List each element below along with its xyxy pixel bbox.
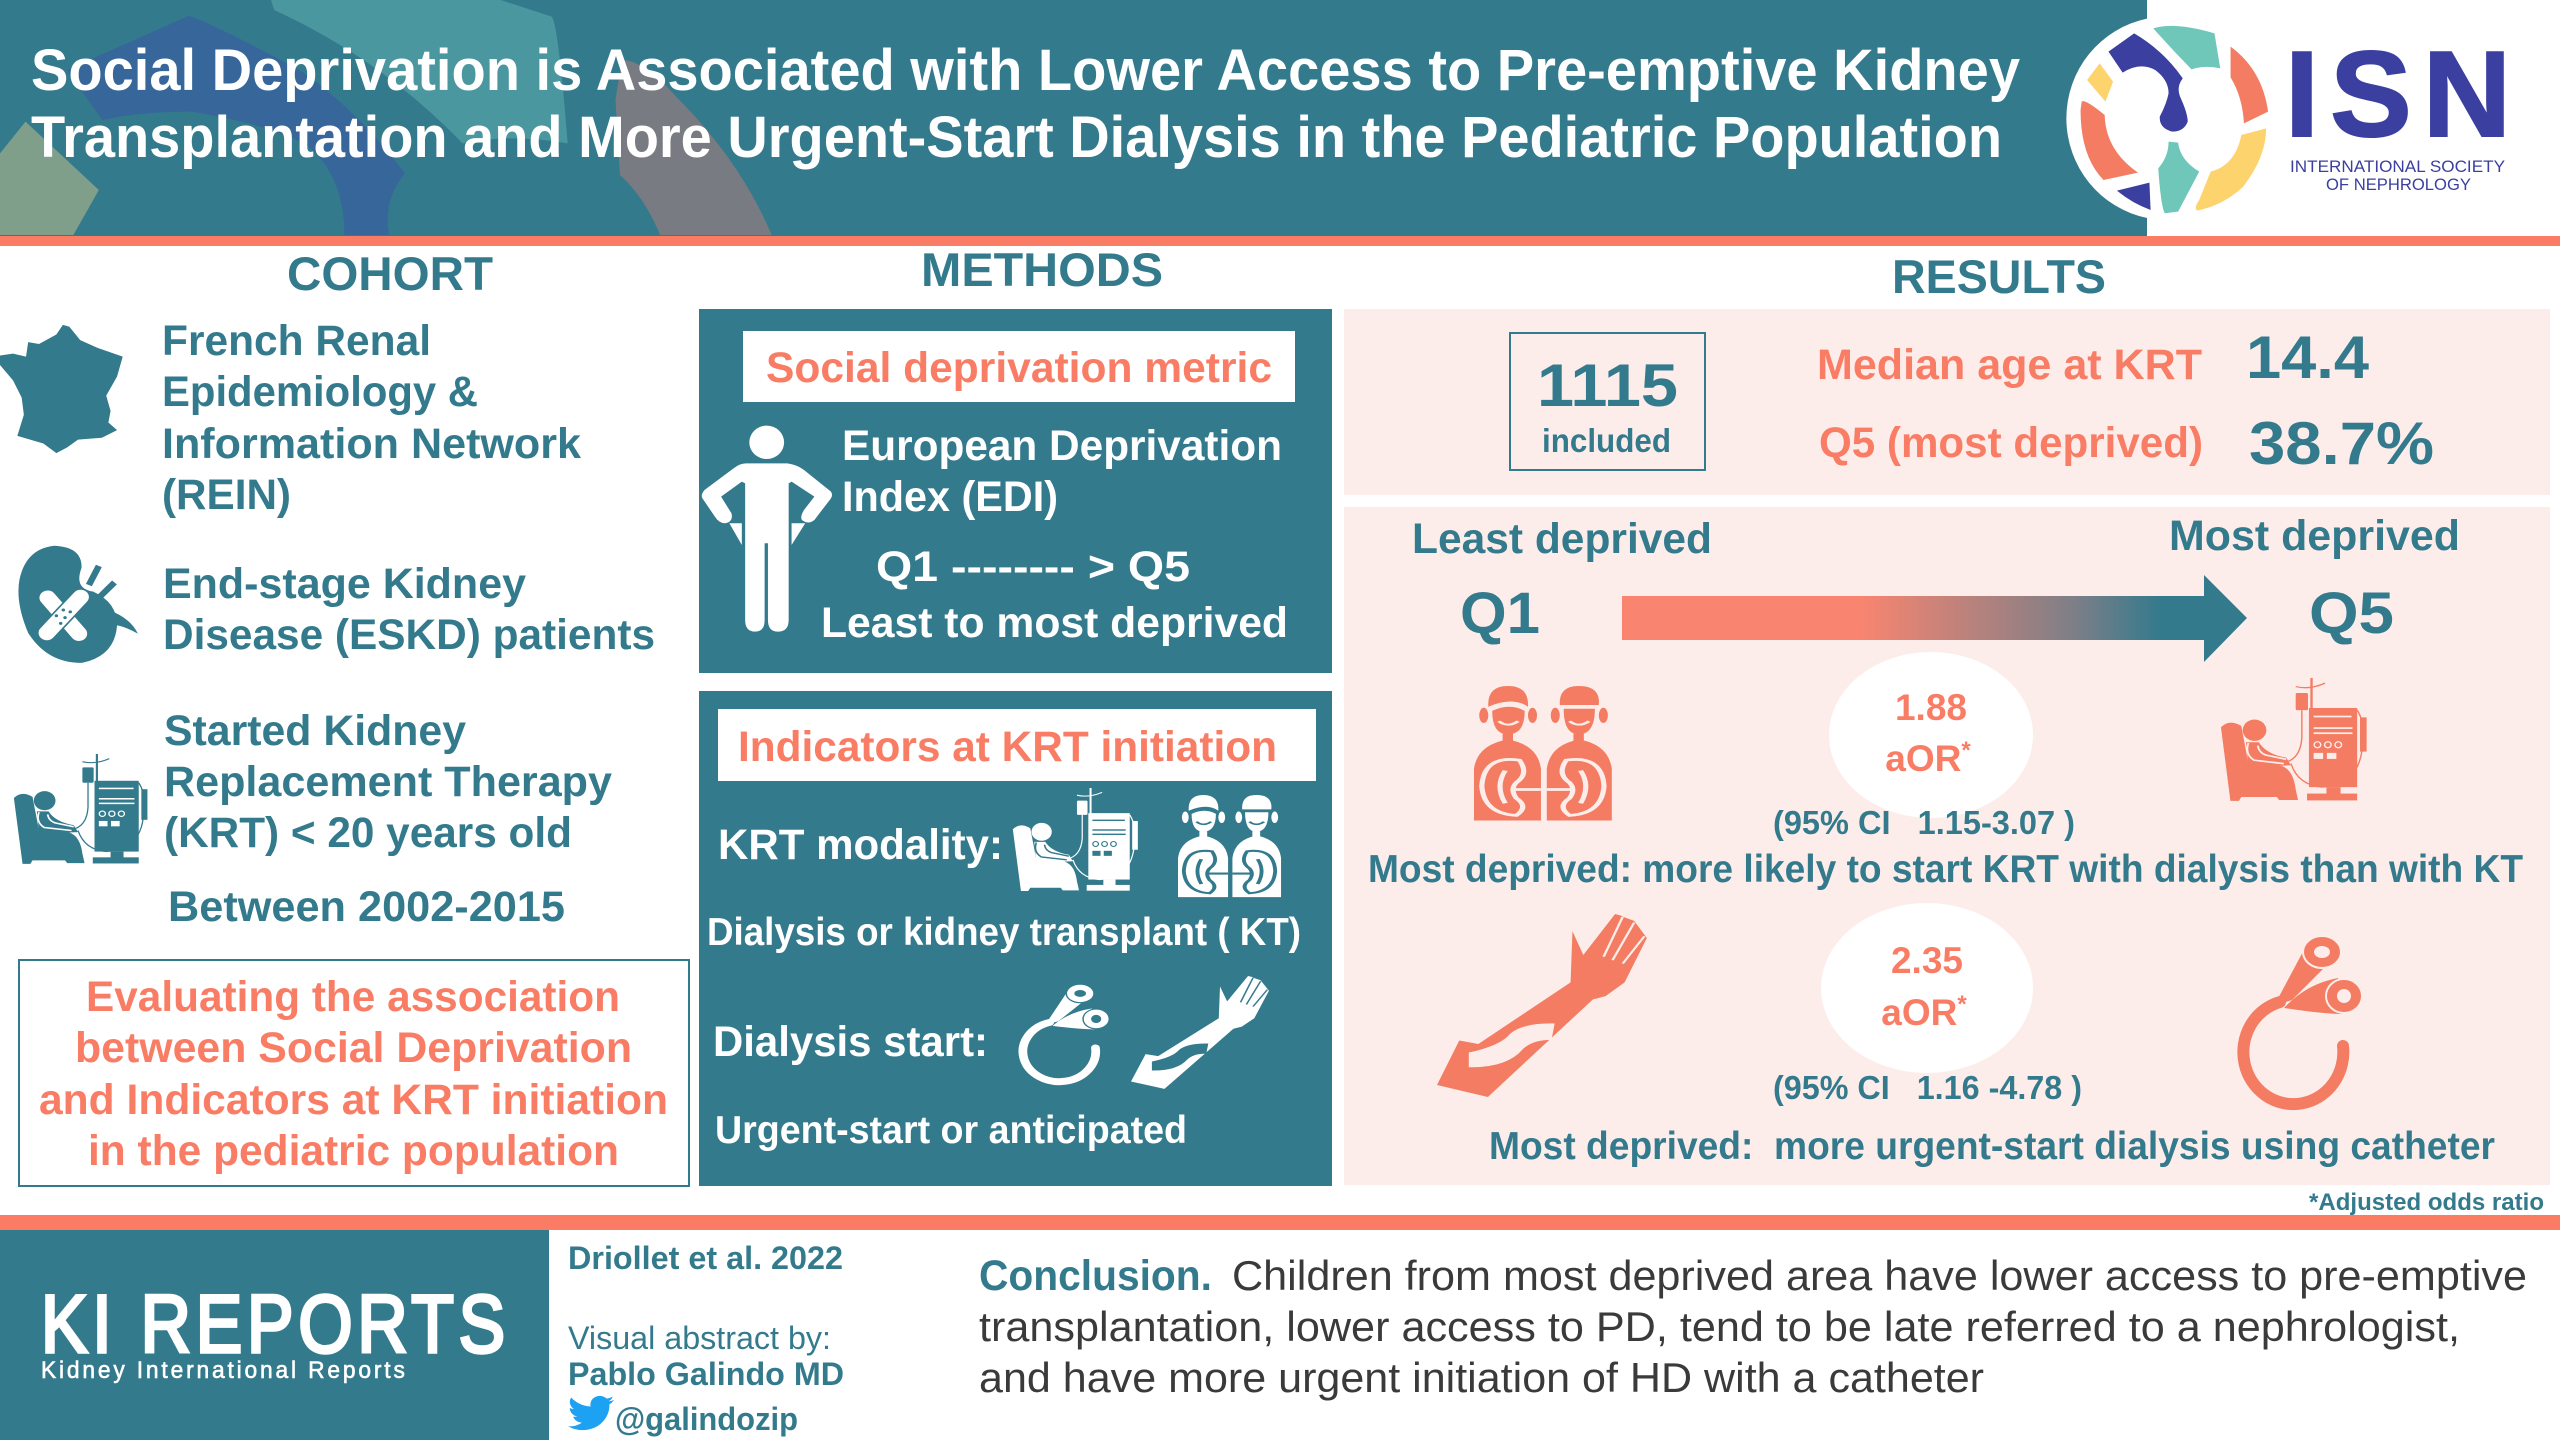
most deprived label: Q5 [2309,581,2394,646]
icon: catheter, white [1023,984,1109,1082]
cohort text: age and period: Started Kidney [164,707,466,755]
panel: cohort results [1344,309,2550,495]
panel: indicators at KRT initiation [699,691,1332,1186]
odds ratio bubble 1: 1.88 [1895,687,1967,728]
conclusion: Conclusion. [979,1252,1212,1300]
icon: fistula arm, white [1131,976,1269,1089]
cohort text: patients: End-stage Kidney [163,560,526,608]
cohort text: age and period: Between 2002-2015 [168,883,565,931]
citation and credits: @galindozip [615,1401,798,1437]
KI Reports journal logo: Kidney International Reports [41,1356,405,1383]
median age [1817,324,2370,391]
citation and credits: Pablo Galindo MD [568,1356,844,1392]
KRT modality label: KRT modality: [718,821,1003,869]
included count box: 1115 [1537,352,1678,419]
top salmon divider [0,236,2560,246]
most deprived share [1819,410,2434,477]
icon: dialysis, white [1013,788,1138,891]
panel: social deprivation metric [699,309,1332,673]
most deprived label: Most deprived [2169,512,2460,560]
icon: twitter bird [568,1396,614,1430]
aim callout: in the pediatric population [88,1127,619,1175]
footnote: *Adjusted odds ratio [2309,1189,2544,1216]
heading: results: RESULTS [1892,250,2106,303]
icon: fistula arm, salmon [1437,914,1647,1097]
finding 2: Most deprived: more urgent-start dialysis using catheter [1489,1125,2495,1168]
metric text [821,422,1288,647]
ISN logo [2066,19,2511,218]
odds ratio bubble 2 [1821,903,2033,1073]
metric text: Q1 -------- > Q5 [876,543,1190,591]
odds ratio bubble 1: * [1961,737,1971,764]
included count box: included [1542,422,1671,459]
KI Reports journal logo [0,1230,549,1440]
aim callout [19,960,689,1186]
citation and credits: Visual abstract by: [568,1320,831,1356]
cohort text: registry: (REIN) [162,471,291,519]
ISN logo: INTERNATIONAL SOCIETY [2290,157,2505,176]
icon: kidney transplant, salmon [1474,686,1612,821]
icon: dialysis patient, cohort [14,754,147,864]
metric heading: Social deprivation metric [766,344,1272,392]
dialysis start caption: Urgent-start or anticipated [715,1109,1187,1152]
finding 1: Most deprived: more likely to start KRT with dialysis than with KT [1368,848,2523,891]
aim callout: Evaluating the association [86,973,620,1021]
heading: cohort: COHORT [287,247,493,300]
odds ratio bubble 1: aOR [1885,738,1961,779]
included count box [1510,333,1705,470]
cohort text: age and period [164,707,612,931]
citation and credits: Driollet et al. 2022 [568,1240,843,1276]
dialysis start label: Dialysis start: [713,1018,988,1066]
metric text: Least to most deprived [821,599,1288,647]
header band [0,0,2147,236]
conclusion: and have more urgent initiation of HD with a catheter [979,1354,1984,1401]
median age: Median age at KRT [1817,341,2202,389]
bottom salmon divider [0,1215,2560,1230]
arrow: gradient from Q1 to Q5 [1622,575,2247,662]
conclusion: transplantation, lower access to PD, tend to be late referred to a nephrologist, [979,1303,2460,1350]
icon: dialysis, salmon [2221,678,2367,801]
least deprived label [1412,515,1712,646]
aim callout: between Social Deprivation [75,1024,632,1072]
metric text: Index (EDI) [842,473,1058,521]
median age: 14.4 [2246,324,2370,391]
odds ratio bubble 2: * [1957,991,1967,1018]
ISN logo: ISN [2285,26,2511,162]
icon: person with empty pockets [702,426,832,632]
citation and credits [568,1240,844,1437]
most deprived share: Q5 (most deprived) [1819,419,2203,467]
cohort text: patients: Disease (ESKD) patients [163,611,655,659]
most deprived share: 38.7% [2249,410,2434,477]
modality caption: Dialysis or kidney transplant ( KT) [707,911,1301,954]
KI Reports journal logo: KI REPORTS [41,1279,505,1370]
cohort text: patients [163,560,655,659]
conclusion: Children from most deprived area have lower access to pre-emptive [1232,1252,2527,1299]
cohort text: registry: Information Network [162,420,581,468]
aim callout: and Indicators at KRT initiation [39,1076,668,1124]
least deprived label: Q1 [1460,581,1540,646]
cohort text: age and period: (KRT) < 20 years old [164,809,572,857]
metric text: European Deprivation [842,422,1282,470]
cohort text: age and period: Replacement Therapy [164,758,612,806]
odds ratio bubble 2: aOR [1881,992,1957,1033]
icon: map of France [0,325,123,453]
cohort text: registry: Epidemiology & [162,368,478,416]
least deprived label: Least deprived [1412,515,1712,563]
title: Social Deprivation is Associated with Lower Access to Pre-emptive Kidney [31,38,2020,103]
odds ratio bubble 1 [1829,652,2033,818]
heading: methods: METHODS [921,243,1163,296]
confidence interval 1: (95% CI 1.15-3.07 ) [1773,804,2075,841]
cohort text: registry: French Renal [162,317,431,365]
odds ratio bubble 2: 2.35 [1891,940,1963,981]
title [31,38,2020,170]
confidence interval 2: (95% CI 1.16 -4.78 ) [1773,1069,2082,1106]
indicators heading [718,709,1316,781]
indicators heading: Indicators at KRT initiation [738,723,1277,771]
most deprived label [2169,512,2460,646]
ISN logo: OF NEPHROLOGY [2326,175,2471,194]
icon: catheter, salmon [2243,936,2362,1104]
conclusion [979,1252,2527,1401]
cohort text: registry [162,317,581,519]
icon: kidney with bandage [18,546,138,663]
metric heading [743,331,1295,402]
title: Transplantation and More Urgent-Start Dialysis in the Pediatric Population [31,105,2002,170]
icon: kidney transplant, white [1178,795,1281,897]
panel: main results [1344,507,2550,1185]
